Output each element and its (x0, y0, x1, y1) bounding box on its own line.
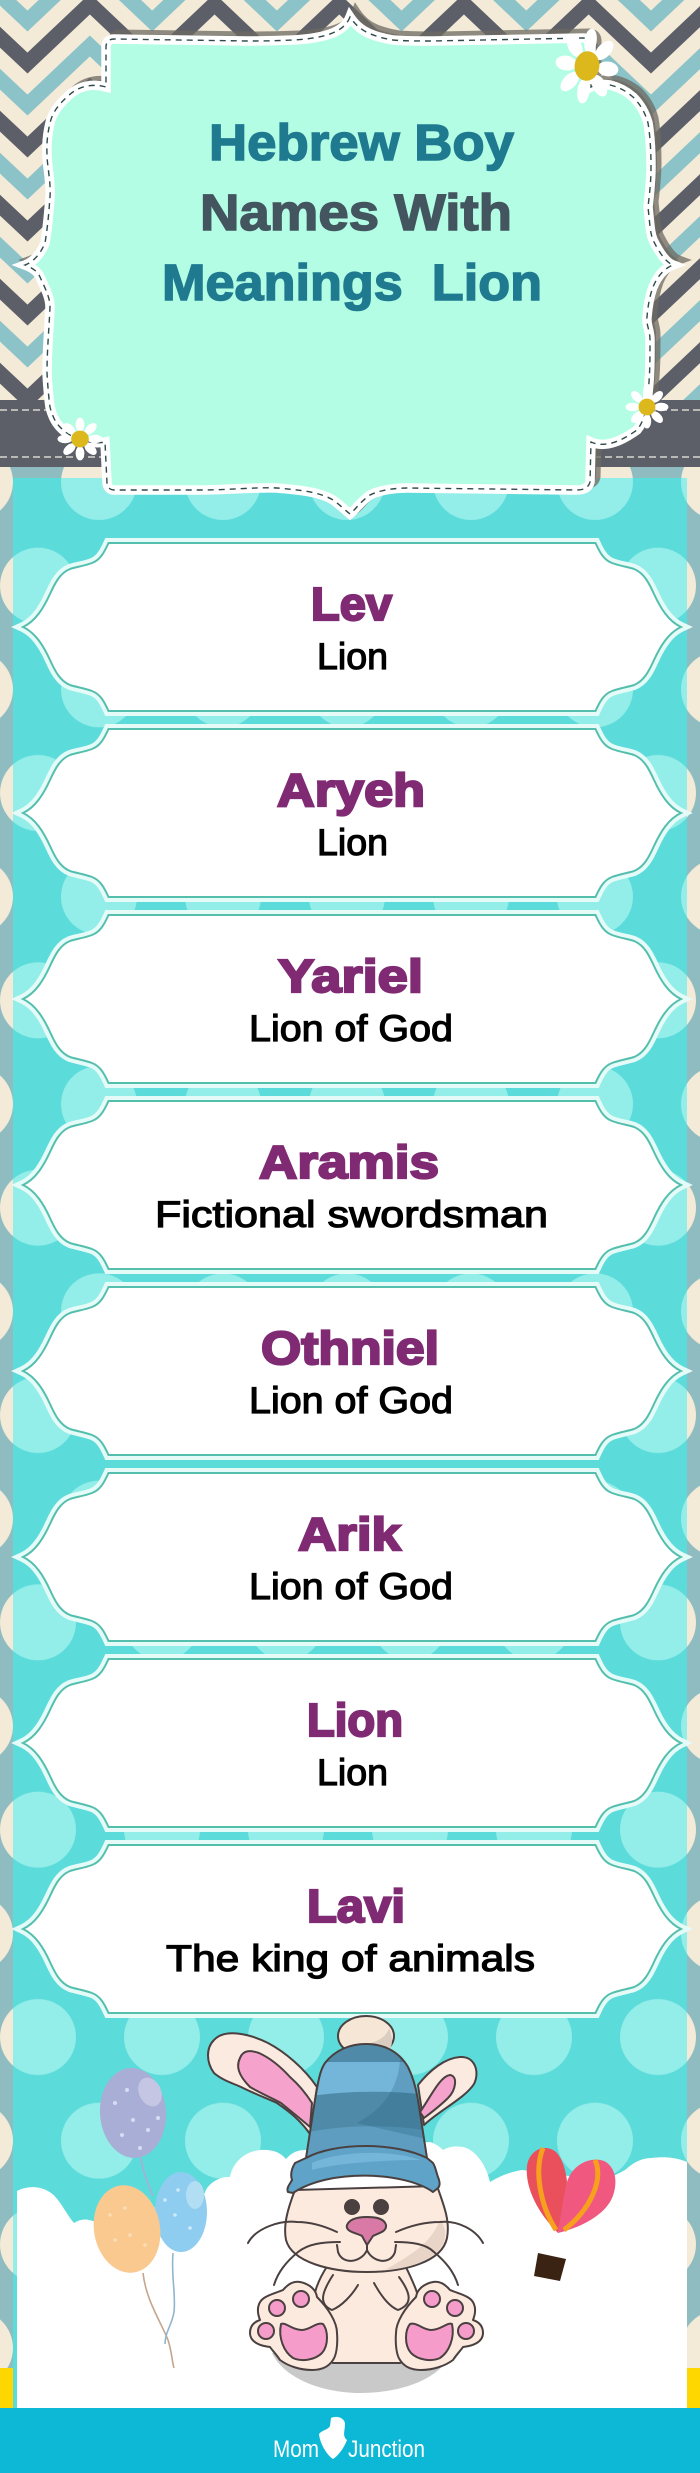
panel: Arik: Lion of God (249, 1566, 453, 1607)
title text: Hebrew Boy (209, 114, 515, 171)
blue balloon (155, 2172, 207, 2252)
panel: Othniel: Lion of God (249, 1380, 453, 1421)
head (285, 2186, 448, 2272)
whiskers (248, 2222, 483, 2285)
panel: Lion (23, 1659, 681, 1827)
footer bar (0, 2408, 700, 2473)
balloons (87, 2066, 207, 2368)
plaque shadow (31, 12, 679, 509)
balloon strings (141, 2158, 174, 2368)
logo: MomJunction (273, 2417, 425, 2463)
logo text: Mom (273, 2436, 319, 2463)
icon: daisy bottom left (58, 418, 102, 460)
hat (287, 2016, 440, 2193)
background: chevron header (0, 0, 700, 441)
panel: Lion: Lion (307, 1694, 403, 1746)
panel: Lavi: The king of animals (166, 1938, 535, 1979)
right foot (396, 2282, 483, 2370)
panel: Othniel: Othniel (261, 1322, 439, 1374)
ground shadow (272, 2353, 447, 2393)
body (312, 2265, 421, 2363)
panel: Lavi (23, 1845, 681, 2013)
right ear (418, 2057, 476, 2125)
title text: Names With (200, 184, 512, 241)
illustration: bunny with hat (208, 2016, 483, 2393)
panel: Arik (23, 1473, 681, 1641)
panel: Yariel: Yariel (278, 950, 423, 1002)
panel: Aryeh: Lion (317, 822, 388, 863)
nose (347, 2217, 386, 2245)
left foot (250, 2282, 337, 2370)
arms (323, 2275, 358, 2310)
title text (162, 114, 542, 311)
icon: daisy top right (550, 24, 624, 108)
mouth (337, 2245, 396, 2261)
hat brim (287, 2146, 440, 2193)
panel: Lion: Lion (317, 1752, 388, 1793)
panel: Aramis: Fictional swordsman (155, 1194, 548, 1235)
panel: Yariel: Lion of God (249, 1008, 453, 1049)
panel: Lavi: Lavi (307, 1880, 405, 1932)
panel: Arik: Arik (298, 1508, 401, 1560)
logo text (273, 2436, 425, 2463)
panel: Othniel (23, 1287, 681, 1455)
panel: Aryeh (23, 729, 681, 897)
icon: heart hot-air balloon (527, 2148, 615, 2281)
title text: Meanings Lion (162, 254, 542, 311)
logo mother and child mark (319, 2417, 347, 2459)
purple balloon (97, 2066, 169, 2160)
icon: daisy bottom right (626, 386, 668, 428)
panel: Aramis: Aramis (259, 1136, 439, 1188)
hat stripes (307, 2045, 426, 2156)
plaque body (25, 17, 673, 514)
white clouds (17, 2142, 687, 2408)
background: teal polka dot panel (13, 478, 687, 2408)
background: grey stitched band (0, 400, 700, 467)
panel: Lev (23, 543, 681, 711)
heart envelope (527, 2148, 567, 2233)
basket (534, 2253, 566, 2281)
panel: Aryeh: Aryeh (277, 764, 425, 816)
pom-pom (338, 2016, 394, 2056)
orange balloon (87, 2180, 167, 2278)
panel: Aramis (23, 1101, 681, 1269)
panel: Lev: Lion (317, 636, 388, 677)
left ear (208, 2033, 317, 2134)
logo text: Junction (348, 2436, 425, 2463)
title plaque (25, 12, 679, 514)
eyes (344, 2199, 389, 2215)
panel: Yariel (23, 915, 681, 1083)
background: side strips with cream dots (0, 467, 700, 2408)
panel: Lev: Lev (311, 578, 392, 630)
